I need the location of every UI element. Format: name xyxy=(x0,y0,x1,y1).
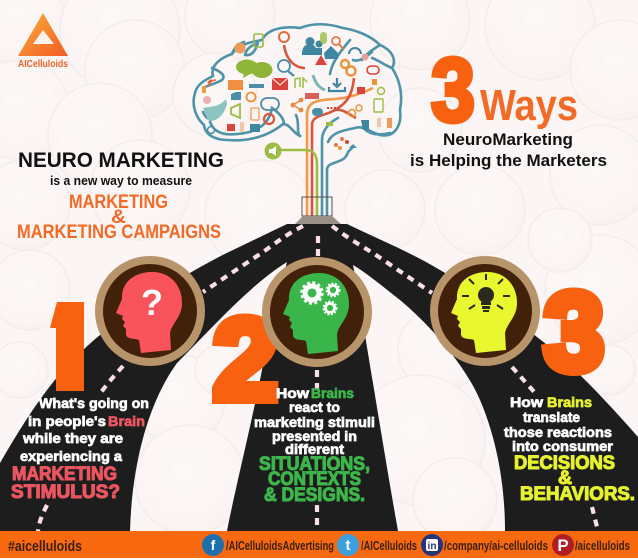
text block 1: STIMULUS? xyxy=(11,482,120,503)
roads xyxy=(0,224,638,531)
twitter link: /AICelluloids xyxy=(361,538,417,553)
text block 1: What's going on xyxy=(39,396,149,411)
logo xyxy=(18,13,68,70)
heading: neuro marketing: NEURO MARKETING xyxy=(18,149,224,172)
numeral 3: 3 xyxy=(544,271,604,394)
text block 2 xyxy=(254,386,375,506)
facebook link xyxy=(202,534,334,556)
text block 3: How xyxy=(510,395,544,410)
head badge 2: gears xyxy=(262,257,372,367)
heading: neuro marketing: & xyxy=(111,207,126,228)
text block 2: presented in xyxy=(272,429,357,444)
heading: 3 ways: is Helping the Marketers xyxy=(410,151,607,170)
text block 2: CONTEXTS xyxy=(268,469,361,490)
text block 1: Brain xyxy=(108,414,145,429)
facebook link: f xyxy=(211,537,216,553)
text block 3: into consumer xyxy=(512,439,614,454)
text block 3: translate xyxy=(523,410,580,425)
head badge 1: question xyxy=(95,256,205,366)
head badge 1: question: ? xyxy=(141,282,163,323)
facebook link: /AICelluloidsAdvertising xyxy=(226,538,334,553)
text block 3: Brains xyxy=(547,395,592,410)
twitter link xyxy=(337,534,417,556)
linkedin link: in xyxy=(428,541,436,552)
head badge 3: light bulb xyxy=(430,256,540,366)
text block 1: MARKETING xyxy=(12,464,117,485)
heading: 3 ways xyxy=(410,41,607,170)
text block 1: in people's xyxy=(28,414,106,429)
hashtag: #aicelluloids xyxy=(8,538,82,555)
numeral 1: 1 xyxy=(30,275,102,419)
linkedin link xyxy=(421,534,548,556)
text block 1: experiencing a xyxy=(20,449,123,464)
heading: 3 ways: 3 xyxy=(431,41,475,141)
speaker node xyxy=(264,142,282,160)
heading: neuro marketing: is a new way to measure xyxy=(50,173,192,188)
text block 3 xyxy=(504,395,635,505)
text block 2: How xyxy=(276,386,310,401)
text block 3: those reactions xyxy=(504,425,612,440)
text block 2: & DESIGNS. xyxy=(264,485,365,506)
text block 1: while they are xyxy=(22,431,124,446)
road centre dashes xyxy=(38,226,598,531)
cables xyxy=(273,45,373,216)
text block 3: & xyxy=(558,468,572,489)
text block 2: react to xyxy=(289,400,340,415)
text block 3: BEHAVIORS. xyxy=(520,484,635,505)
linkedin link: /company/ai-celluloids xyxy=(444,538,548,553)
brain illustration xyxy=(194,24,401,224)
pinterest link xyxy=(552,534,630,556)
text block 3: DECISIONS xyxy=(514,453,615,474)
text block 2: different xyxy=(285,442,345,457)
footer bar xyxy=(0,531,638,560)
road connector base xyxy=(295,216,341,224)
text block 2: marketing stimuli xyxy=(254,415,375,430)
brain outline and folds xyxy=(194,24,401,216)
heading: neuro marketing: MARKETING xyxy=(69,192,168,213)
pinterest link: P xyxy=(557,536,569,555)
heading: neuro marketing xyxy=(17,149,224,243)
logo: AICelluloids xyxy=(18,59,68,70)
twitter link: t xyxy=(346,537,350,554)
brain icons xyxy=(202,32,392,150)
text block 2: SITUATIONS, xyxy=(259,454,370,475)
heading: 3 ways: NeuroMarketing xyxy=(443,130,573,149)
text block 2: Brains xyxy=(311,386,354,401)
text block 1 xyxy=(11,396,149,503)
numeral 2: 2 xyxy=(213,296,278,424)
connector box xyxy=(302,197,332,216)
heading: 3 ways: Ways xyxy=(480,81,578,130)
heading: neuro marketing: MARKETING CAMPAIGNS xyxy=(17,222,221,243)
